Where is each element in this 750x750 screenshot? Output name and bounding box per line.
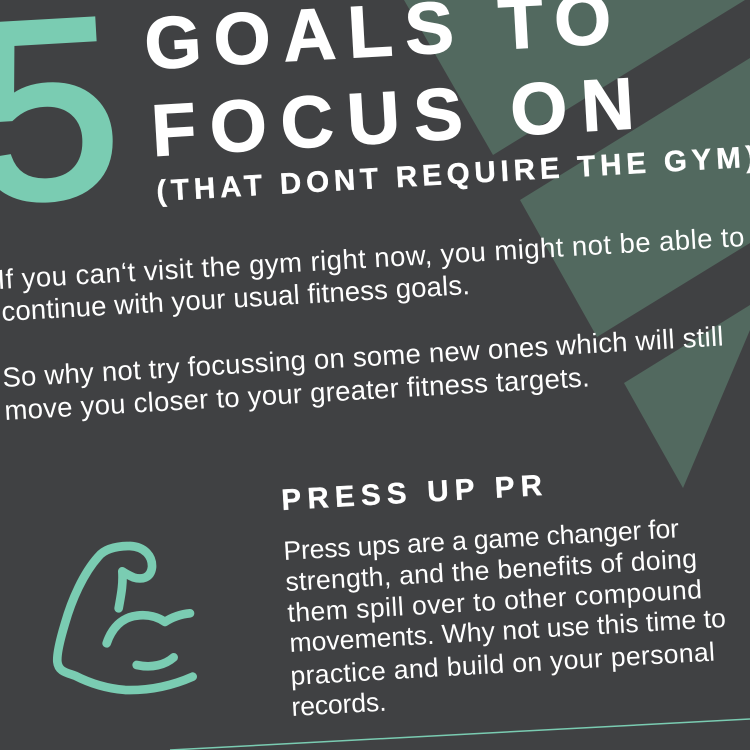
intro paragraph: continue with your usual fitness goals.: [1, 269, 471, 327]
section body text: [283, 513, 727, 722]
title: FOCUS ON: [149, 63, 636, 172]
title: [142, 0, 636, 172]
background shape: upper triangle: [404, 0, 745, 155]
background shape: lower triangle: [624, 305, 750, 488]
background shape: middle triangle: [520, 58, 750, 337]
intro paragraph: [0, 221, 745, 426]
section body text: movements. Why not use this time to: [289, 603, 727, 658]
section heading: press up PR: PRESS UP PR: [281, 469, 543, 517]
section body text: records.: [291, 687, 387, 722]
section body text: Press ups are a game changer for: [283, 513, 680, 566]
section body text: them spill over to other compound: [287, 574, 703, 628]
section body text: practice and build on your personal: [290, 637, 716, 691]
section body text: strength, and the benefits of doing: [285, 543, 698, 597]
intro paragraph: move you closer to your greater fitness targets.: [4, 361, 590, 426]
icon: flexed arm: [57, 546, 193, 690]
intro paragraph: If you can‘t visit the gym right now, you might not be able to: [0, 221, 745, 295]
intro paragraph: So why not try focussing on some new ones which will still: [2, 320, 724, 393]
subtitle: (THAT DONT REQUIRE THE GYM): [156, 141, 750, 208]
